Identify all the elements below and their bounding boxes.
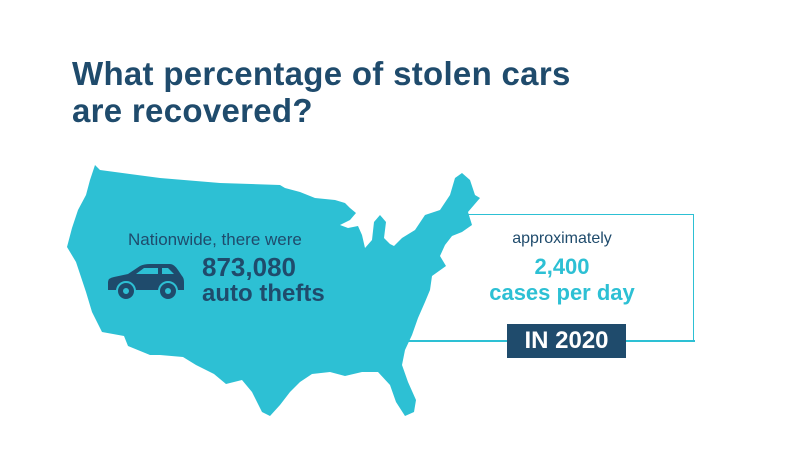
text: nationwide: Nationwide, there were — [128, 230, 302, 249]
icon: car — [108, 264, 184, 299]
text: approximately: approximately — [512, 230, 612, 247]
label: in 2020 — [507, 324, 626, 358]
title — [72, 55, 571, 129]
stat: per day: 2,400 — [534, 254, 590, 279]
stat: thefts — [202, 252, 325, 307]
stat: thefts: 873,080 — [202, 252, 296, 282]
callout box — [408, 214, 695, 342]
stat: per day: cases per day — [489, 280, 635, 305]
stat: per day — [489, 254, 635, 305]
label: in 2020: IN 2020 — [524, 327, 609, 354]
stat: thefts: auto thefts — [202, 280, 325, 307]
title: are recovered? — [72, 92, 313, 129]
title: What percentage of stolen cars — [72, 55, 571, 92]
